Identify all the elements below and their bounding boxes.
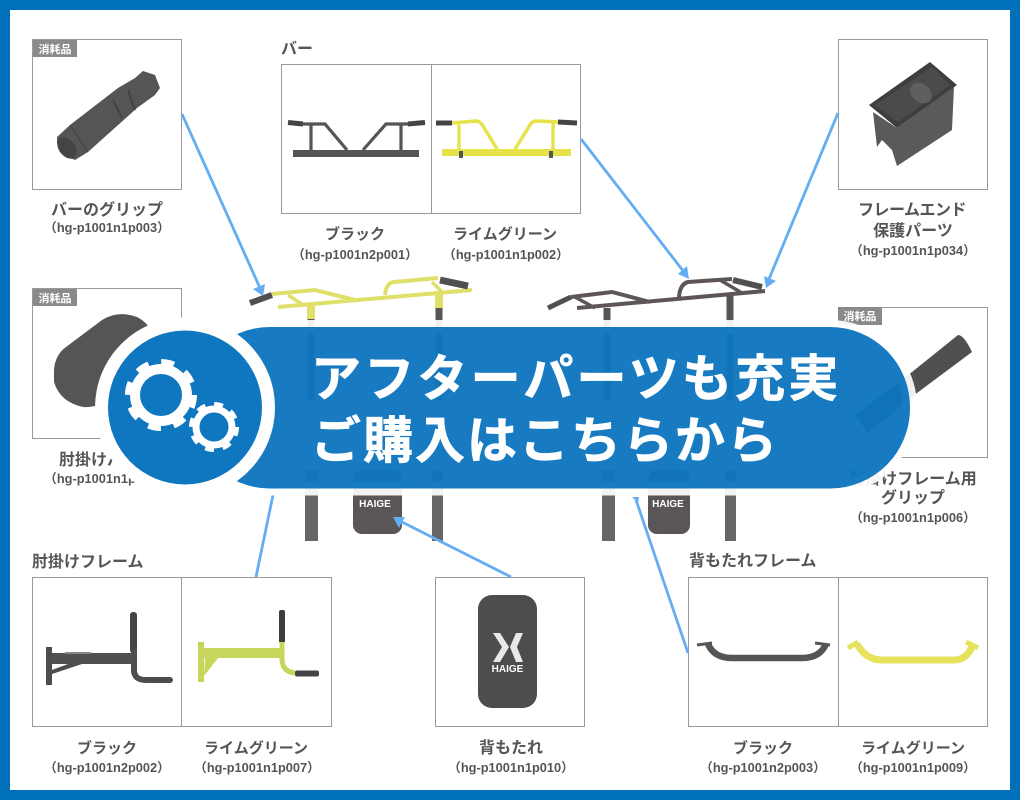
label: end protector: フレームエンド [858, 202, 966, 219]
heading: backrest frame: 背もたれフレーム [689, 552, 817, 570]
panel: bar [281, 41, 580, 262]
arrow: elbow frame to lime product [256, 495, 273, 577]
icon: black bar [288, 122, 425, 157]
heading: elbow frame: 肘掛けフレーム [32, 552, 144, 571]
label: frame grip: 肘掛けフレーム用 [849, 469, 977, 488]
panel: elbow frame [32, 552, 332, 775]
label: bar grip [44, 200, 170, 235]
label: black backrest frame: ブラック [733, 739, 793, 757]
label: lime bar: ライムグリーン [453, 225, 557, 243]
panel: frame end protector [838, 40, 988, 258]
label: black bar [292, 225, 418, 262]
label: lime bar [443, 225, 569, 262]
icon: lime bar [436, 121, 577, 158]
label: backrest: 背もたれ [479, 739, 543, 757]
badge: consumable: 消耗品 [38, 42, 72, 56]
heading: banner line one: アフターパーツも充実 [311, 351, 842, 407]
icon: gears badge [95, 318, 275, 498]
panel: bar grip [32, 40, 182, 235]
arrow: end protector to bar [764, 113, 838, 288]
label: lime backrest frame: （hg-p1001n1p009） [850, 760, 976, 775]
label: black backrest frame: （hg-p1001n2p003） [700, 760, 826, 775]
icon: grip [53, 71, 160, 162]
badge: consumable: 消耗品 [38, 291, 72, 305]
label: end protector: （hg-p1001n1p034） [850, 243, 976, 258]
label: black elbow frame: （hg-p1001n2p002） [44, 760, 170, 775]
label: backrest: （hg-p1001n1p010） [448, 760, 574, 775]
label: lime elbow frame [194, 739, 320, 775]
arrow: backrest to pad [393, 517, 511, 577]
icon: large gear [129, 363, 193, 427]
label: lime elbow frame: ライムグリーン [204, 739, 308, 757]
panel: elbow frame grip [838, 307, 988, 525]
panel: backrest [436, 578, 584, 775]
label: end protector [850, 202, 976, 258]
label: black elbow frame: ブラック [77, 739, 137, 757]
icon: elbow pad [54, 314, 152, 407]
label: bar grip: （hg-p1001n1p003） [44, 220, 170, 235]
label: black elbow frame [44, 739, 170, 775]
badge: consumable [838, 307, 882, 325]
product: lime pull-up bar [250, 278, 472, 541]
icon: lime elbow frame [198, 610, 319, 682]
badge: consumable [33, 40, 77, 57]
label: frame grip: グリップ [881, 488, 945, 507]
product: black pull-up bar [548, 279, 765, 541]
panel: backrest frame [688, 552, 988, 775]
badge: consumable: 消耗品 [844, 309, 876, 323]
icon: black elbow frame [46, 612, 170, 685]
label: lime backrest frame [850, 739, 976, 775]
label: black bar: ブラック [325, 225, 385, 243]
product: black frame back pad: HAIGE [652, 499, 684, 510]
icon: backrest pad: HAIGE [492, 664, 524, 675]
label: black backrest frame [700, 739, 826, 775]
heading: banner line two: ご購入はこちらから [311, 413, 779, 469]
label: lime backrest frame: ライムグリーン [861, 739, 965, 757]
label: bar grip: バーのグリップ [51, 200, 163, 219]
heading: bar: バー [281, 41, 313, 58]
banner [190, 327, 910, 488]
panel: elbow pad [32, 288, 182, 486]
label: elbow pad: 肘掛けパッド [59, 450, 155, 469]
label: black bar: （hg-p1001n2p001） [292, 247, 418, 262]
label: frame grip: （hg-p1001n1p006） [850, 510, 976, 525]
product: black frame back pad [648, 470, 690, 534]
label: elbow pad [44, 450, 170, 486]
arrow: bar grip to bar [182, 114, 265, 296]
badge: consumable [33, 289, 77, 306]
label: end protector: 保護パーツ [873, 222, 953, 240]
banner glow [190, 327, 910, 488]
label: lime bar: （hg-p1001n1p002） [443, 247, 569, 262]
arrow: backrest frame to black product [632, 497, 688, 653]
label: backrest [448, 739, 574, 775]
product: lime frame back pad: HAIGE [359, 499, 391, 510]
label: frame grip [849, 469, 977, 525]
icon: black backrest frame [697, 643, 830, 658]
icon: small gear [192, 405, 236, 449]
icon: end cap [869, 62, 957, 166]
icon: backrest pad [478, 595, 537, 708]
label: elbow pad: （hg-p1001n1p005） [44, 471, 170, 486]
icon: lime backrest frame [848, 642, 978, 660]
product: lime frame back pad [353, 470, 402, 534]
label: lime elbow frame: （hg-p1001n1p007） [194, 760, 320, 775]
arrow: bar to black bar [581, 139, 689, 279]
icon: frame grip [855, 335, 972, 433]
